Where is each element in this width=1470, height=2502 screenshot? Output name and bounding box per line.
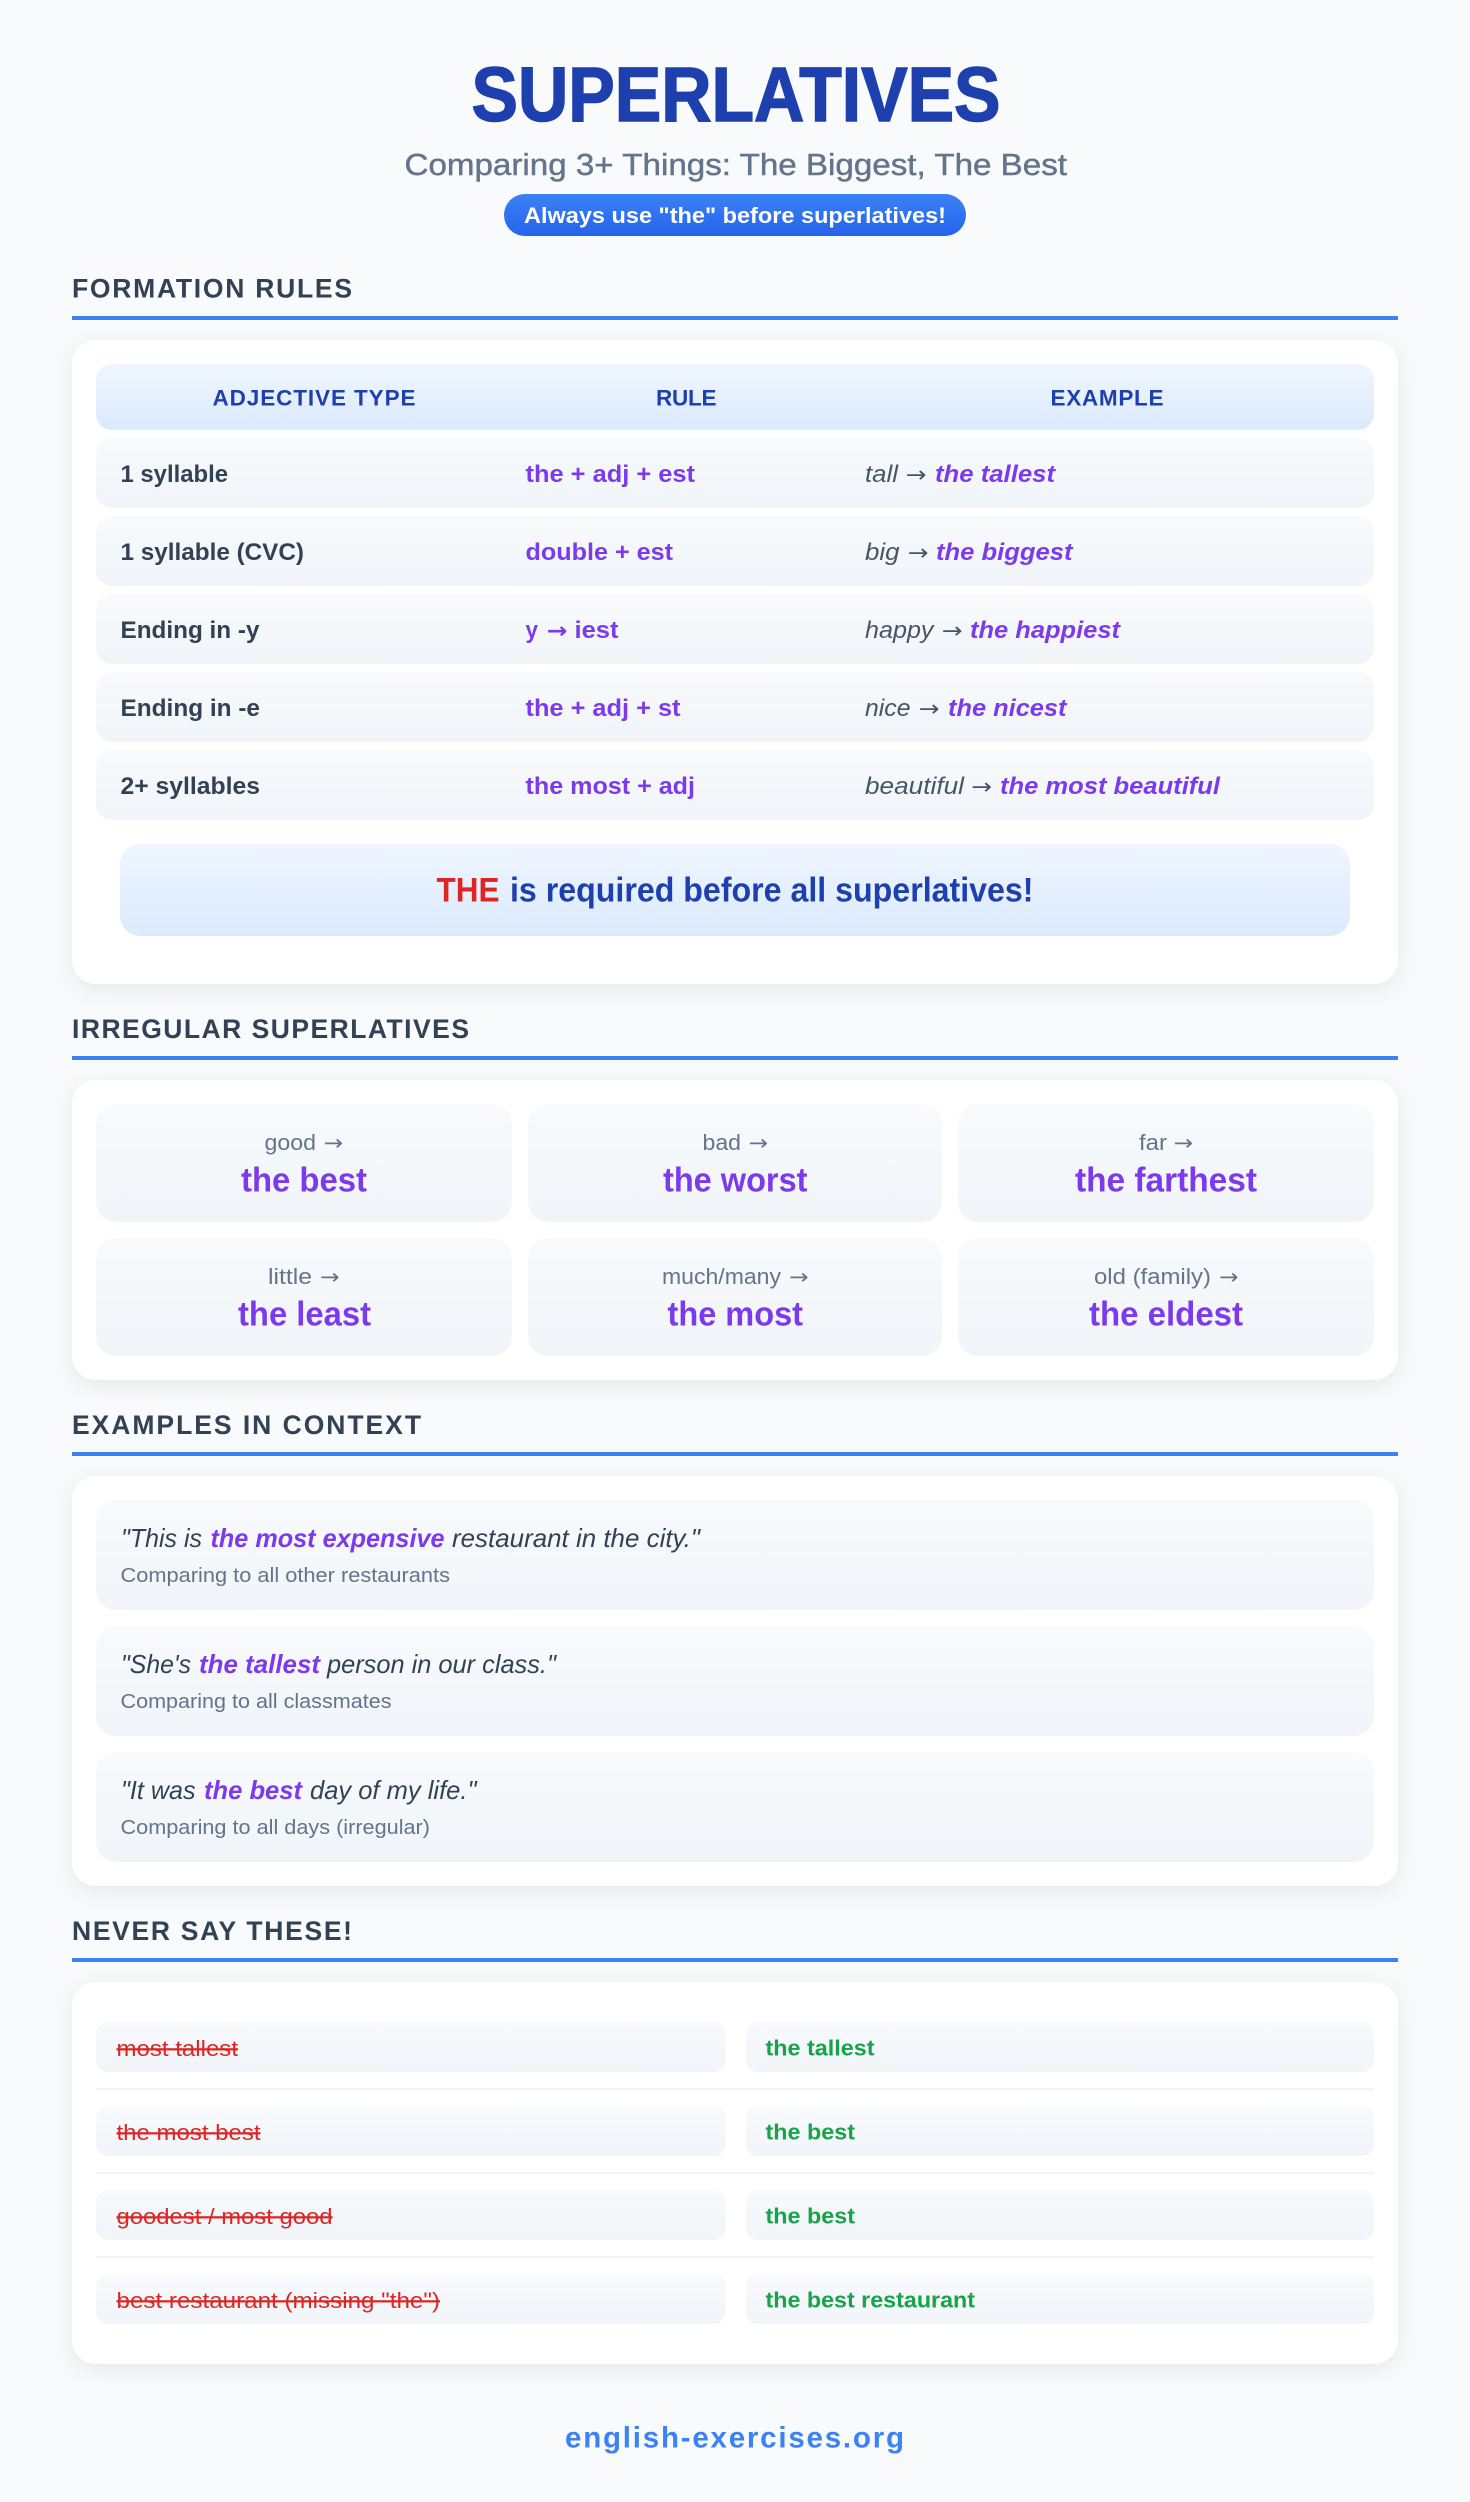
table row: 1 syllable CVC: → [908,541,928,566]
footer: site name: english-exercises.org [565,2422,904,2454]
correction: goodest: the best [766,2204,856,2228]
panel: examples in context [72,1476,1398,1886]
panel: formation rules [72,340,1398,984]
table row: 1 syllable: the + adj + est [526,461,695,488]
card: far [958,1104,1374,1222]
table row: 1 syllable CVC: big [865,539,900,566]
correction: most tallest: the tallest [766,2036,875,2060]
card: much/many: the most [668,1296,803,1334]
correction: best restaurant: the best restaurant [766,2288,976,2312]
correction: most tallest [96,2022,1374,2072]
example: most expensive [96,1500,1374,1610]
table row: 1 syllable CVC: double + est [526,539,673,566]
heading: formation rules [72,274,1398,320]
example: best [96,1752,1374,1862]
table row: 1 syllable CVC [96,516,1374,586]
card: old family [958,1238,1374,1356]
card: good: → [324,1131,343,1155]
card: little: → [320,1265,340,1289]
card: little: little [268,1264,312,1289]
card: good: the best [241,1162,367,1200]
correction: the most best: the best [766,2120,856,2144]
card: good [96,1104,512,1222]
table row: 1 syllable: tall [865,461,899,488]
correction: the most best: the most best [116,2120,261,2145]
table row: 1 syllable: → [906,463,926,488]
card: bad: the worst [663,1162,808,1200]
example: tallest: Comparing to all classmates [120,1690,392,1713]
heading: irregular superlatives: IRREGULAR SUPERLATIVES [72,1014,469,1044]
table row: 2+ syllables [96,750,1374,820]
table row: 1 syllable CVC: the biggest [936,539,1074,566]
example: most expensive: restaurant in the city." [452,1523,702,1553]
example: tallest: the tallest [199,1649,321,1679]
example: most expensive: "This is [121,1523,202,1553]
table row: ending in e: → [919,697,939,722]
badge: always use the [504,194,966,236]
table row: ending in y: Ending in -y [120,617,260,644]
table row: ending in y [96,594,1374,664]
table row: ending in e: the nicest [948,695,1068,722]
table row: ending in e: Ending in -e [120,695,260,722]
example: best: Comparing to all days (irregular) [120,1816,430,1839]
table row: 2+ syllables: beautiful [865,773,965,800]
table row: ending in y: happy [865,617,936,644]
table row: ending in e: nice [865,695,910,722]
table row: ending in y: → [942,619,962,644]
correction: the most best [96,2106,1374,2156]
table header row: ADJECTIVE TYPE [212,386,416,410]
table row: 2+ syllables: 2+ syllables [120,773,260,800]
example: most expensive: the most expensive [210,1523,444,1553]
correction: best restaurant: best restaurant (missing "the") [116,2288,440,2313]
table row: 2+ syllables: the most + adj [526,773,695,800]
table row: 1 syllable: 1 syllable [120,461,228,488]
correction: most tallest: most tallest [116,2036,239,2061]
table row: 2+ syllables: the most beautiful [1000,773,1221,800]
table row: ending in y: the happiest [970,617,1121,644]
heading: formation rules: FORMATION RULES [72,274,352,304]
card: bad: → [749,1131,768,1155]
table header row: EXAMPLE [1050,386,1164,410]
example: best: the best [204,1775,303,1805]
example: tallest: "She's [121,1649,191,1679]
heading: irregular superlatives [72,1014,1398,1060]
title: SUPERLATIVES [472,52,1000,138]
panel: never say these [72,1982,1398,2364]
card: old family: the eldest [1089,1296,1243,1334]
card: little: the least [238,1296,371,1334]
example: best: day of my life." [310,1775,478,1805]
correction: goodest: goodest / most good [116,2204,332,2229]
card: far: → [1174,1131,1193,1155]
table row: ending in y: iest [574,617,619,644]
heading: never say these: NEVER SAY THESE! [72,1916,352,1946]
table row: ending in y: → [547,619,567,644]
subtitle: Comparing 3+ Things: The Biggest, The Best [404,148,1068,182]
example: best: "It was [121,1775,196,1805]
example: tallest [96,1626,1374,1736]
table header row: RULE [656,386,716,410]
table row: 1 syllable [96,438,1374,508]
heading: examples in context [72,1410,1398,1456]
callout: the is required: THE [436,872,500,910]
heading: never say these [72,1916,1398,1962]
table row: ending in e: the + adj + st [526,695,681,722]
table row: ending in y: y [526,617,539,644]
card: good: good [264,1130,316,1155]
callout: the is required: is required before all superlatives! [510,872,1034,910]
heading: examples in context: EXAMPLES IN CONTEXT [72,1410,421,1440]
table row: 1 syllable: the tallest [935,461,1056,488]
correction: goodest [96,2190,1374,2240]
card: little [96,1238,512,1356]
table row: 2+ syllables: → [971,775,992,800]
card: far: far [1139,1130,1167,1155]
card: much/many: → [789,1265,809,1289]
card: far: the farthest [1075,1162,1257,1200]
card: bad: bad [702,1130,741,1155]
callout: the is required [120,844,1350,936]
card: old family: → [1219,1265,1239,1289]
badge: always use the: Always use "the" before superlatives! [524,203,946,228]
table row: 1 syllable CVC: 1 syllable (CVC) [120,539,304,566]
table row: ending in e [96,672,1374,742]
example: tallest: person in our class." [326,1649,558,1679]
card: bad [528,1104,942,1222]
table header row [96,364,1374,430]
card: much/many [528,1238,942,1356]
example: most expensive: Comparing to all other restaurants [120,1564,450,1587]
card: old family: old (family) [1094,1264,1211,1289]
correction: best restaurant [96,2274,1374,2324]
panel: irregular superlatives [72,1080,1398,1380]
card: much/many: much/many [662,1264,781,1289]
